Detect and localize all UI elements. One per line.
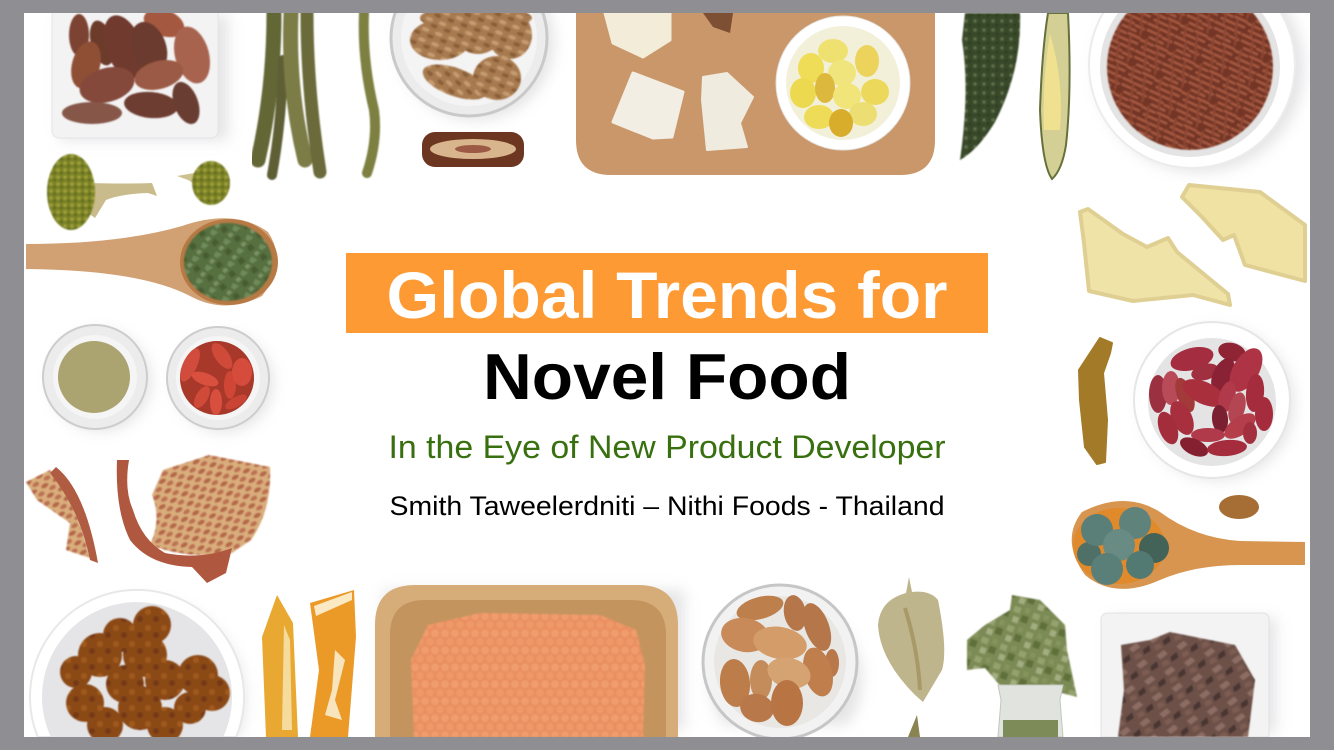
- icon: date: [422, 132, 524, 167]
- icon: cacao nibs dish: [1101, 613, 1269, 737]
- icon: avocado slices: [960, 13, 1070, 179]
- icon: cocoa beans in dish: [52, 4, 218, 138]
- icon: ginger slices: [1080, 185, 1305, 305]
- icon: bowl of dried fruit: [30, 590, 244, 743]
- icon: wooden spoon with herbs: [26, 218, 278, 306]
- icon: almonds in glass bowl: [703, 585, 857, 739]
- heading: Novel Food: Novel Food: [483, 340, 851, 413]
- icon: wooden board with coconut and capsules: [576, 5, 935, 175]
- icon: turmeric root: [1079, 338, 1112, 464]
- icon: dried orange slices: [262, 590, 356, 737]
- author line: Smith Taweelerdniti – Nithi Foods - Thailand: [390, 491, 944, 521]
- icon: chopped herbs and glass jar: [967, 595, 1077, 737]
- icon: goji berries jar: [167, 327, 269, 429]
- icon: physalis: [878, 577, 944, 737]
- icon: powder jar: [43, 325, 147, 429]
- icon: kidney beans bowl: [1134, 322, 1290, 478]
- icon: wooden spoon with spirulina tablets: [1072, 495, 1305, 589]
- icon: pomegranate: [26, 455, 270, 583]
- icon: asparagus: [258, 13, 375, 175]
- icon: red rice bowl: [1089, 0, 1295, 168]
- icon: walnuts in glass bowl: [391, 0, 547, 116]
- title banner: Global Trends for: [386, 258, 948, 332]
- subtitle: In the Eye of New Product Developer: [388, 429, 946, 465]
- icon: wooden tray of red lentils: [375, 585, 678, 737]
- icon: broccoli: [47, 154, 230, 230]
